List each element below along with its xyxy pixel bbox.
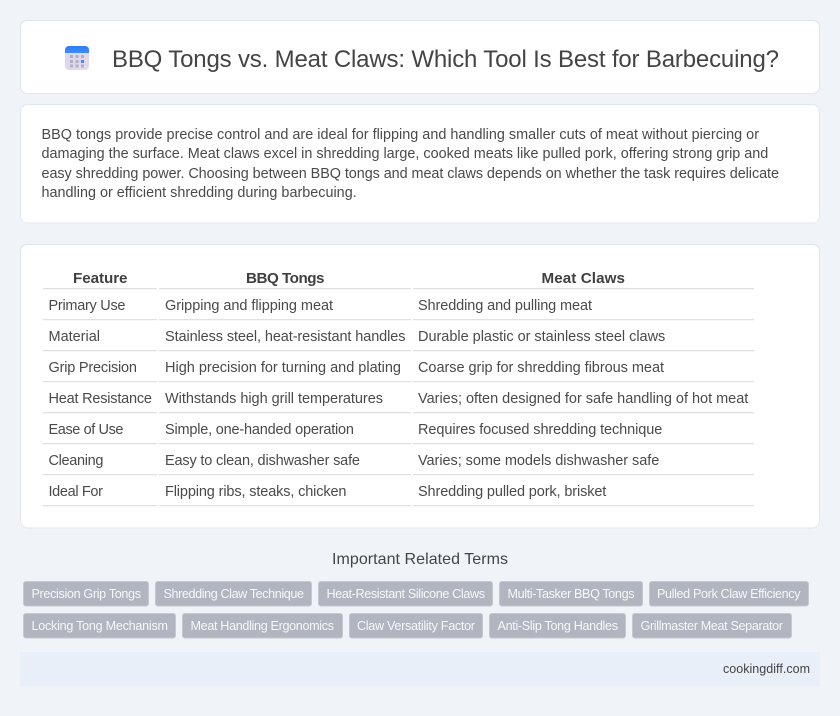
row: heat resistance: Heat Resistance [48,391,152,407]
row: cleaning [43,453,754,475]
chip: locking tong mechanism: Locking Tong Mechanism [32,619,168,633]
panel: comparison table [20,244,820,528]
chip: multi-tasker bbq tongs: Multi-Tasker BBQ Tongs [508,587,634,601]
row: heat resistance: Varies; often designed for safe handling of hot meat [418,391,748,407]
row: primary use [43,298,754,320]
chip: shredding claw technique [156,582,312,606]
row: grip precision: High precision for turning and plating [165,360,401,376]
row: primary use: Shredding and pulling meat [418,298,592,314]
intro paragraph: handling or efficient shredding during barbecuing. [42,185,357,201]
row: heat resistance [43,391,754,413]
table header row [43,270,754,289]
row: primary use: Primary Use [48,298,126,314]
chip: pulled pork claw efficiency: Pulled Pork Claw Efficiency [657,587,801,601]
chip: precision grip tongs: Precision Grip Tongs [32,587,141,601]
row: material [43,329,754,351]
chip: anti-slip tong handles: Anti-Slip Tong Handles [498,619,618,633]
row: grip precision: Grip Precision [48,360,137,376]
row: grip precision [43,360,754,382]
chip: locking tong mechanism [24,614,176,638]
heading: important related terms: Important Related Terms [332,551,508,568]
intro paragraph: BBQ tongs provide precise control and are ideal for flipping and handling smaller cuts of meat without piercing or [42,127,759,143]
row: material: Durable plastic or stainless steel claws [418,329,665,345]
table header row: Feature [73,270,128,287]
related term chips [24,582,808,638]
chip: grillmaster meat separator [632,614,792,638]
table header row: Meat Claws [542,270,625,287]
footer source: cookingdiff.com [723,662,810,676]
header panel [20,20,820,94]
row: grip precision: Coarse grip for shredding fibrous meat [418,360,664,376]
chip: grillmaster meat separator: Grillmaster Meat Separator [640,619,783,633]
chip: heat-resistant silicone claws [318,582,492,606]
chip: heat-resistant silicone claws: Heat-Resistant Silicone Claws [326,587,485,601]
row: ideal for: Flipping ribs, steaks, chicken [165,484,346,500]
row: ease of use: Simple, one-handed operation [165,422,354,438]
row: material: Stainless steel, heat-resistant handles [165,329,406,345]
chip: meat handling ergonomics: Meat Handling Ergonomics [190,619,334,633]
row: cleaning: Cleaning [48,453,104,469]
row: ideal for [43,484,754,506]
row: ideal for: Shredding pulled pork, brisket [418,484,606,500]
intro paragraph: easy shredding power. Choosing between BBQ tongs and meat claws depends on whether the task requires delicate [42,166,779,182]
intro paragraph [42,127,779,201]
intro paragraph: damaging the surface. Meat claws excel in shredding large, cooked meats like pulled pork, offering strong grip and [42,146,768,162]
footer bar [20,652,820,686]
chip: claw versatility factor: Claw Versatility Factor [357,619,475,633]
row: cleaning: Easy to clean, dishwasher safe [165,453,360,469]
row: ease of use: Requires focused shredding technique [418,422,662,438]
row: primary use: Gripping and flipping meat [165,298,333,314]
row: ease of use [43,422,754,444]
table header row: BBQ Tongs [246,270,324,287]
chip: pulled pork claw efficiency [650,582,808,606]
row: material: Material [48,329,100,345]
chip: anti-slip tong handles [490,614,626,638]
icon: calendar [65,46,89,70]
chip: claw versatility factor [350,614,482,638]
chip: shredding claw technique: Shredding Claw Technique [164,587,304,601]
chip: precision grip tongs [24,582,148,606]
row: heat resistance: Withstands high grill temperatures [165,391,383,407]
chip: multi-tasker bbq tongs [500,582,642,606]
panel: introduction [20,104,820,223]
row: cleaning: Varies; some models dishwasher safe [418,453,659,469]
row: ease of use: Ease of Use [48,422,124,438]
title: BBQ Tongs vs. Meat Claws: Which Tool Is Best for Barbecuing? [112,46,779,73]
row: ideal for: Ideal For [48,484,103,500]
chip: meat handling ergonomics [182,614,342,638]
